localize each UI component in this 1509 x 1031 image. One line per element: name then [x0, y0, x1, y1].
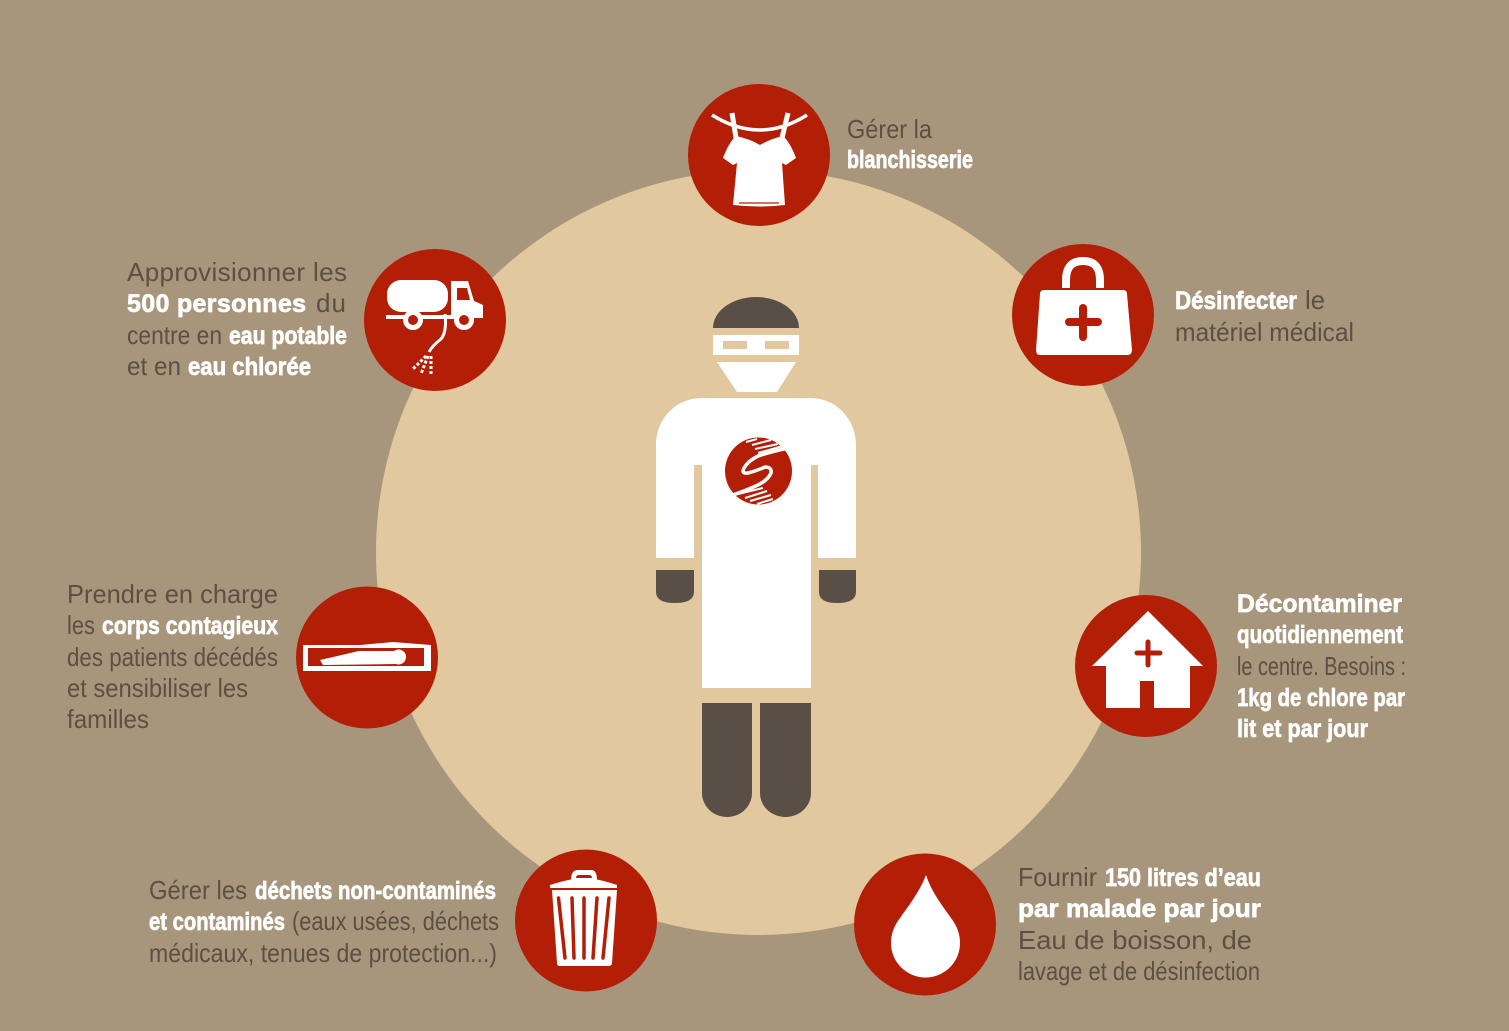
item: water supply for 500 people [127, 249, 506, 391]
label: daily decontamination [1237, 590, 1406, 743]
label: contagious bodies: des patients décédés [67, 642, 278, 672]
icon: t-shirt on line [688, 84, 830, 226]
icon: rubbish bin [515, 850, 657, 992]
label: medical equipment: matériel médical [1175, 317, 1354, 347]
label: contagious bodies: corps contagieux [102, 612, 278, 640]
icon: medical bag [1012, 244, 1154, 386]
label: daily decontamination: le centre. Besoins : [1237, 651, 1406, 681]
label: medical equipment: le [1305, 285, 1325, 315]
label: water supply: Eau de boisson, de [1018, 925, 1252, 955]
label: waste: (eaux usées, déchets [292, 906, 499, 936]
label: waste: déchets non-contaminés [255, 877, 496, 905]
item: daily decontamination [1075, 590, 1406, 743]
label: water supply for 500 people: eau potable [229, 322, 347, 350]
icon: tanker truck [364, 249, 506, 391]
label: laundry: Gérer la [847, 114, 932, 144]
label: water supply for 500 people: centre en [127, 320, 222, 350]
label: daily decontamination: 1kg de chlore par [1237, 684, 1405, 712]
icon: house with cross [1075, 595, 1217, 737]
label: medical equipment: Désinfecter [1175, 287, 1297, 315]
label: water supply for 500 people: Approvisionner les [127, 257, 347, 287]
label: waste [149, 875, 499, 968]
label: contagious bodies: les [67, 610, 95, 640]
item: water supply [854, 854, 1261, 996]
item: medical equipment [1012, 244, 1354, 386]
item: laundry [688, 84, 973, 226]
label: water supply: 150 litres d’eau [1105, 864, 1261, 892]
label: contagious bodies: et sensibiliser les [67, 673, 248, 703]
item: contagious bodies [67, 579, 438, 734]
item: waste [149, 850, 657, 992]
label: water supply: lavage et de désinfection [1018, 956, 1260, 986]
label: water supply for 500 people: du [316, 288, 346, 318]
label: water supply: par malade par jour [1018, 895, 1261, 923]
figure: protected health worker [656, 297, 856, 817]
label: laundry: blanchisserie [847, 146, 973, 174]
label: water supply for 500 people: 500 personnes [127, 290, 306, 318]
central circle [376, 170, 1141, 935]
label: waste: et contaminés [149, 908, 285, 936]
label: water supply for 500 people: et en [127, 351, 181, 381]
label: waste: médicaux, tenues de protection...) [149, 938, 497, 968]
label: daily decontamination: Décontaminer [1237, 590, 1402, 618]
icon: body in a bag [296, 586, 438, 728]
label: water supply: Fournir [1018, 862, 1097, 892]
label: water supply for 500 people [127, 257, 347, 381]
label: water supply for 500 people: eau chlorée [188, 353, 311, 381]
label: daily decontamination: lit et par jour [1237, 715, 1368, 743]
label: contagious bodies: familles [67, 704, 149, 734]
label: contagious bodies [67, 579, 278, 734]
label: medical equipment [1175, 285, 1354, 347]
logo on gown [725, 438, 792, 504]
label: water supply [1018, 862, 1261, 986]
label: laundry [847, 114, 973, 174]
label: waste: Gérer les [149, 875, 247, 905]
label: daily decontamination: quotidiennement [1237, 621, 1404, 649]
icon: water drop [854, 854, 996, 996]
label: contagious bodies: Prendre en charge [67, 579, 278, 609]
